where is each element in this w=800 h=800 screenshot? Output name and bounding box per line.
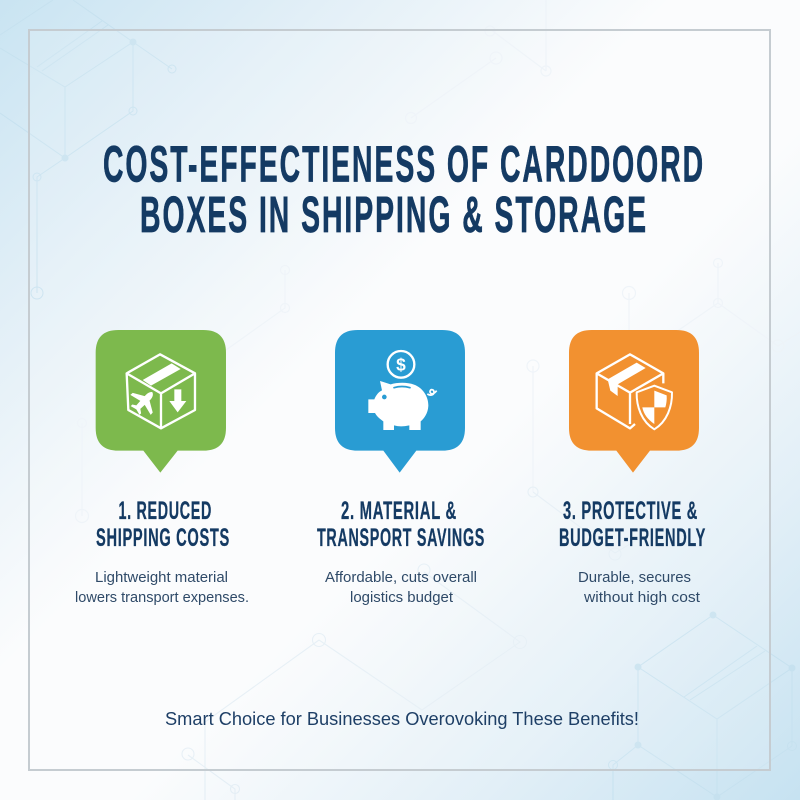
icon: blue speech bubble with piggy bank: $: [396, 354, 406, 374]
icon: green speech bubble with box: [96, 330, 226, 473]
description 1: lowers transport expenses.: [75, 589, 249, 606]
description 1: [75, 569, 249, 606]
background network: lower centre lines: [182, 487, 640, 800]
description 3: Durable, secures: [578, 569, 691, 586]
description 2: [325, 569, 477, 606]
heading 2: [317, 497, 485, 552]
description 3: [578, 569, 701, 606]
background network: faint centre nodes: [76, 0, 800, 522]
description 2: Affordable, cuts overall: [325, 569, 477, 586]
card 2: material and transport savings: [317, 330, 485, 606]
background network: bottom-right box: [608, 612, 796, 800]
heading 2: 2. MATERIAL &: [341, 497, 457, 525]
card 3: protective and budget-friendly: [559, 330, 706, 606]
description 3: without high cost: [583, 589, 701, 606]
icon: orange speech bubble with box and shield: [569, 330, 699, 473]
heading 3: [559, 497, 706, 552]
heading 1: SHIPPING COSTS: [96, 524, 230, 552]
description 1: Lightweight material: [95, 569, 228, 586]
heading 2: TRANSPORT SAVINGS: [317, 524, 485, 552]
footer tagline: Smart Choice for Businesses Overovoking These Benefits!: [165, 709, 639, 729]
background network: top-left box: [0, 0, 176, 299]
title: [103, 136, 705, 243]
card 1: reduced shipping costs: [75, 330, 249, 606]
heading 1: [96, 497, 230, 552]
icon: blue speech bubble with piggy bank: [335, 330, 465, 473]
description 2: logistics budget: [350, 589, 454, 606]
heading 1: 1. REDUCED: [118, 497, 212, 525]
heading 3: 3. PROTECTIVE &: [563, 497, 698, 525]
